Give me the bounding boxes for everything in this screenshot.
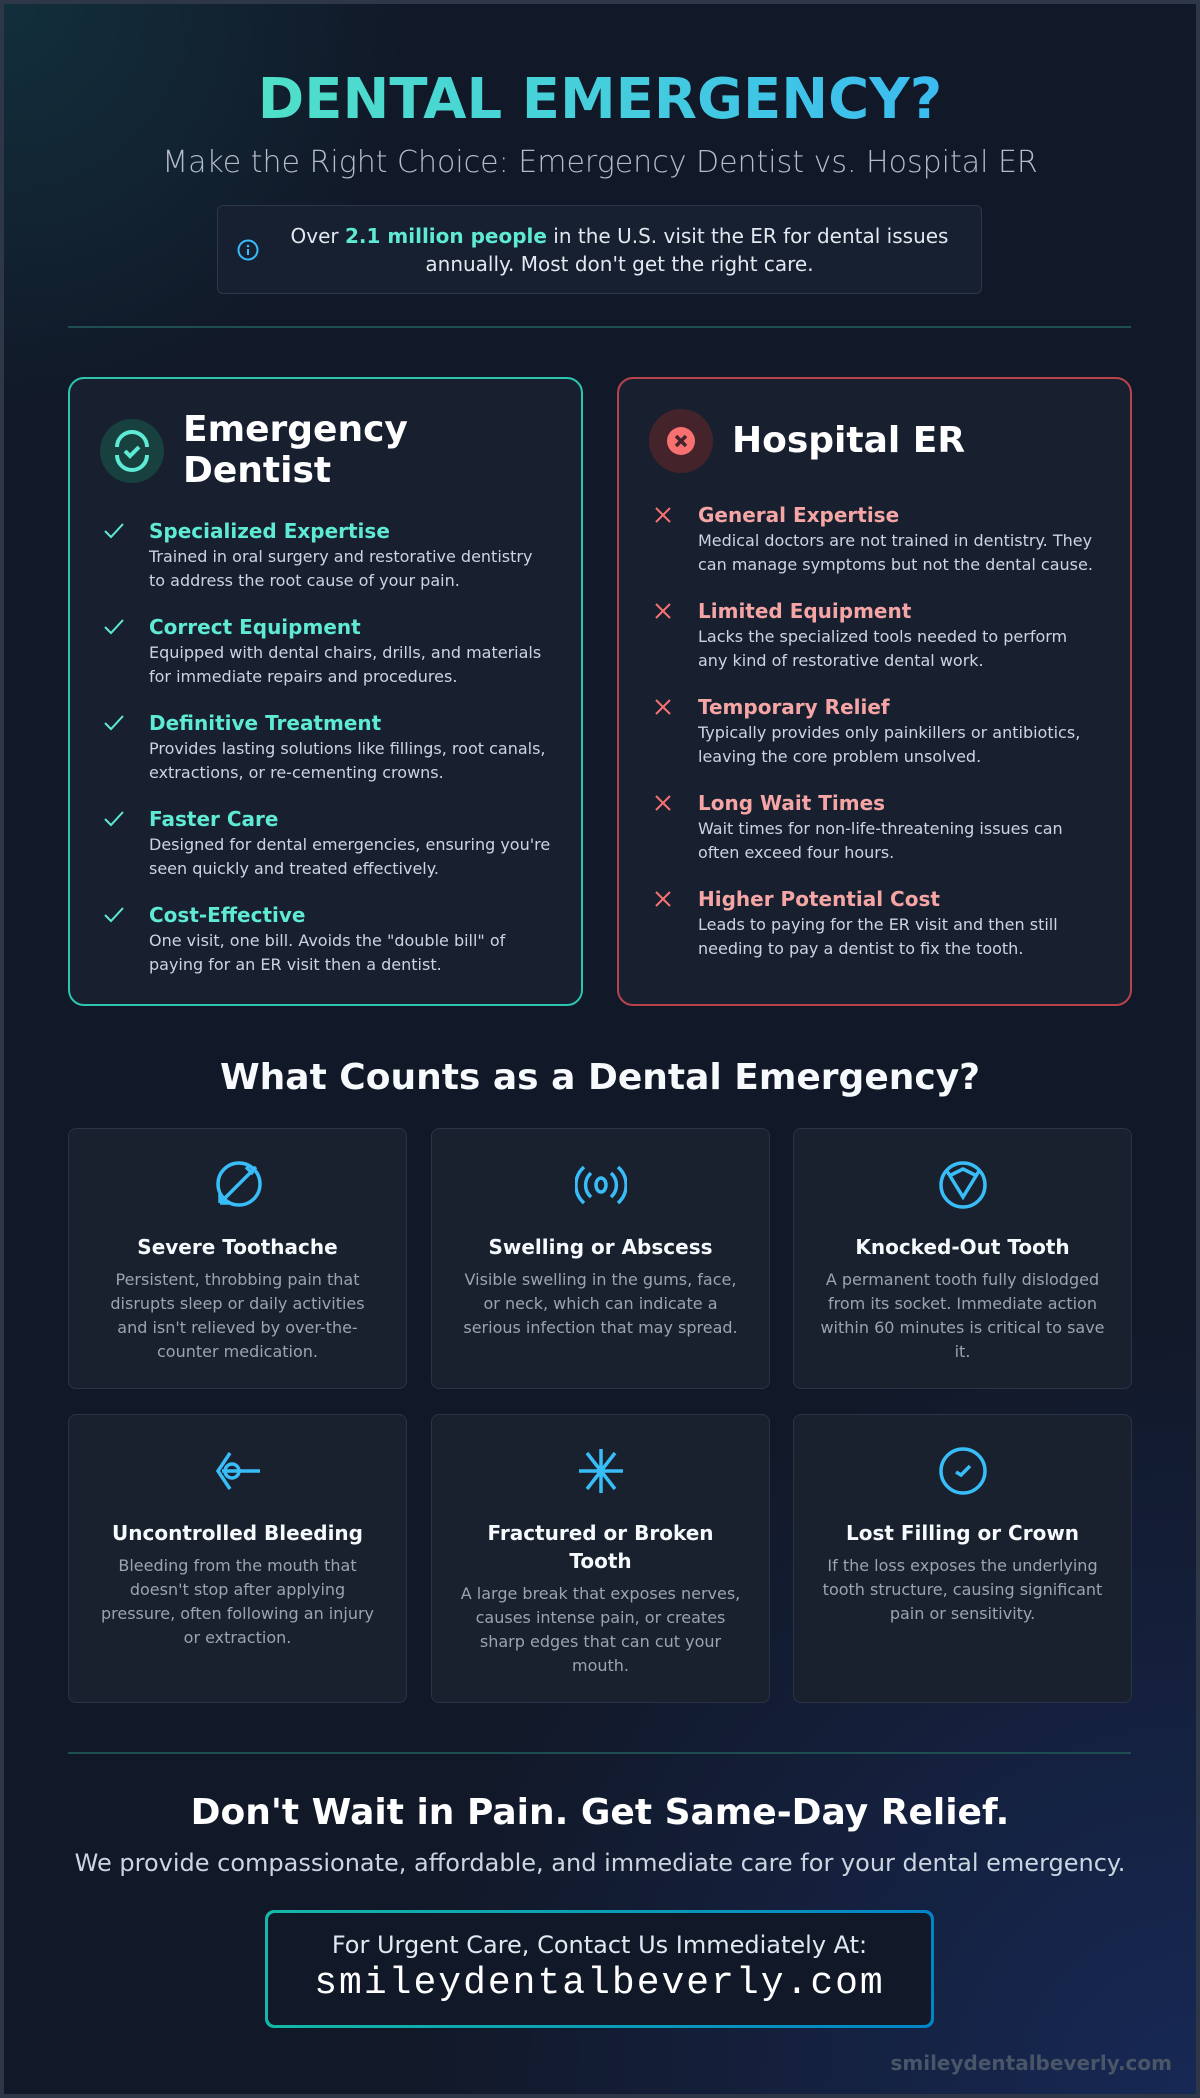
card: severe toothache: Severe Toothache — [137, 1235, 338, 1259]
card: uncontrolled bleeding: Uncontrolled Bleeding — [112, 1521, 363, 1545]
icon: dentist check — [100, 419, 164, 483]
item: cost-effective: One visit, one bill. Avoids the "double bill" of paying for an ER visit then a dentist. — [149, 931, 505, 974]
card: lost filling: If the loss exposes the underlying tooth structure, causing significant pain or sensitivity. — [823, 1556, 1102, 1623]
item: faster care: Designed for dental emergencies, ensuring you're seen quickly and treated effectively. — [149, 835, 550, 878]
item: definitive treatment: Definitive Treatment — [149, 711, 381, 735]
item: cost-effective: Cost-Effective — [149, 903, 305, 927]
icon: swelling — [575, 1166, 627, 1204]
card: knocked-out tooth — [793, 1128, 1132, 1389]
item: limited equipment: Limited Equipment — [698, 599, 911, 623]
item: general expertise: Medical doctors are not trained in dentistry. They can manage symptoms but not the dental cause. — [698, 531, 1093, 574]
card: fractured tooth: Fractured or Broken Tooth — [487, 1521, 714, 1573]
card: lost filling — [793, 1414, 1132, 1703]
icon: er x — [649, 409, 713, 473]
item: temporary relief: Typically provides only painkillers or antibiotics, leaving the core problem unsolved. — [698, 723, 1080, 766]
item: definitive treatment — [104, 711, 546, 782]
item: long wait times: Long Wait Times — [698, 791, 885, 815]
icon: fracture — [579, 1449, 623, 1493]
icon: info — [238, 240, 258, 260]
card: uncontrolled bleeding — [68, 1414, 407, 1703]
card: uncontrolled bleeding: Bleeding from the mouth that doesn't stop after applying pressure, often following an injury or extraction. — [101, 1556, 374, 1647]
item: higher potential cost — [655, 887, 1058, 958]
item: correct equipment — [104, 615, 541, 686]
cta heading: Don't Wait in Pain. Get Same-Day Relief. — [191, 1792, 1009, 1833]
item: correct equipment: Equipped with dental chairs, drills, and materials for immediate repairs and procedures. — [149, 643, 541, 686]
heading: hospital er: Hospital ER — [732, 420, 965, 461]
icon: toothache — [216, 1161, 262, 1207]
stat text: Over 2.1 million people in the U.S. visit the ER for dental issues annually. Most don't get the right care. — [291, 224, 948, 276]
title: DENTAL EMERGENCY? — [258, 67, 942, 132]
icon: knocked-out tooth — [939, 1161, 987, 1209]
card: swelling or abscess — [431, 1128, 770, 1389]
card: severe toothache — [68, 1128, 407, 1389]
card: swelling or abscess: Swelling or Abscess — [488, 1235, 713, 1259]
card: swelling or abscess: Visible swelling in the gums, face, or neck, which can indicate a serious infection that may spread. — [463, 1270, 738, 1337]
heading: emergency dentist — [183, 409, 408, 491]
item: long wait times — [655, 791, 1063, 862]
subtitle: Make the Right Choice: Emergency Dentist vs. Hospital ER — [162, 145, 1038, 180]
item: general expertise — [655, 503, 1093, 574]
panel: emergency dentist — [68, 377, 583, 1006]
item: temporary relief — [655, 695, 1080, 766]
card: lost filling: Lost Filling or Crown — [846, 1521, 1079, 1545]
icon: lost filling — [939, 1447, 987, 1495]
item: long wait times: Wait times for non-life-threatening issues can often exceed four hours. — [698, 819, 1063, 862]
item: correct equipment: Correct Equipment — [149, 615, 361, 639]
item: temporary relief: Temporary Relief — [698, 695, 890, 719]
card: knocked-out tooth: A permanent tooth fully dislodged from its socket. Immediate action within 60 minutes is critical to save it. — [820, 1270, 1105, 1361]
watermark: smileydentalbeverly.com — [890, 2051, 1172, 2075]
item: general expertise: General Expertise — [698, 503, 899, 527]
panel: hospital er — [617, 377, 1132, 1006]
item: higher potential cost: Higher Potential Cost — [698, 887, 940, 911]
cta contact box: smileydentalbeverly.com — [314, 1962, 885, 2005]
callout: statistic — [217, 205, 982, 294]
item: limited equipment — [655, 599, 1067, 670]
item: higher potential cost: Leads to paying for the ER visit and then still needing to pay a dentist to fix the tooth. — [698, 915, 1058, 958]
icon: bleeding — [216, 1452, 260, 1490]
item: specialized expertise — [104, 519, 532, 590]
item: limited equipment: Lacks the specialized tools needed to perform any kind of restorative dental work. — [698, 627, 1067, 670]
heading: emergency dentist: Dentist — [183, 450, 331, 491]
item: specialized expertise: Specialized Expertise — [149, 519, 390, 543]
item: definitive treatment: Provides lasting solutions like fillings, root canals, extractions, or re-cementing crowns. — [149, 739, 546, 782]
section heading: What Counts as a Dental Emergency? — [220, 1057, 980, 1098]
cta contact box — [265, 1910, 934, 2028]
cta contact box: For Urgent Care, Contact Us Immediately At: — [332, 1931, 867, 1959]
item: cost-effective — [104, 903, 506, 974]
item: faster care — [104, 807, 550, 878]
cta subtext: We provide compassionate, affordable, and immediate care for your dental emergency. — [75, 1849, 1125, 1877]
card: knocked-out tooth: Knocked-Out Tooth — [855, 1235, 1070, 1259]
card: severe toothache: Persistent, throbbing pain that disrupts sleep or daily activities and isn't relieved by over-the-counter medication. — [110, 1270, 365, 1361]
heading: emergency dentist: Emergency — [183, 409, 408, 450]
item: specialized expertise: Trained in oral surgery and restorative dentistry to address the root cause of your pain. — [149, 547, 532, 590]
card: fractured tooth — [431, 1414, 770, 1703]
card: fractured tooth: A large break that exposes nerves, causes intense pain, or creates sharp edges that can cut your mouth. — [461, 1584, 740, 1675]
item: faster care: Faster Care — [149, 807, 278, 831]
